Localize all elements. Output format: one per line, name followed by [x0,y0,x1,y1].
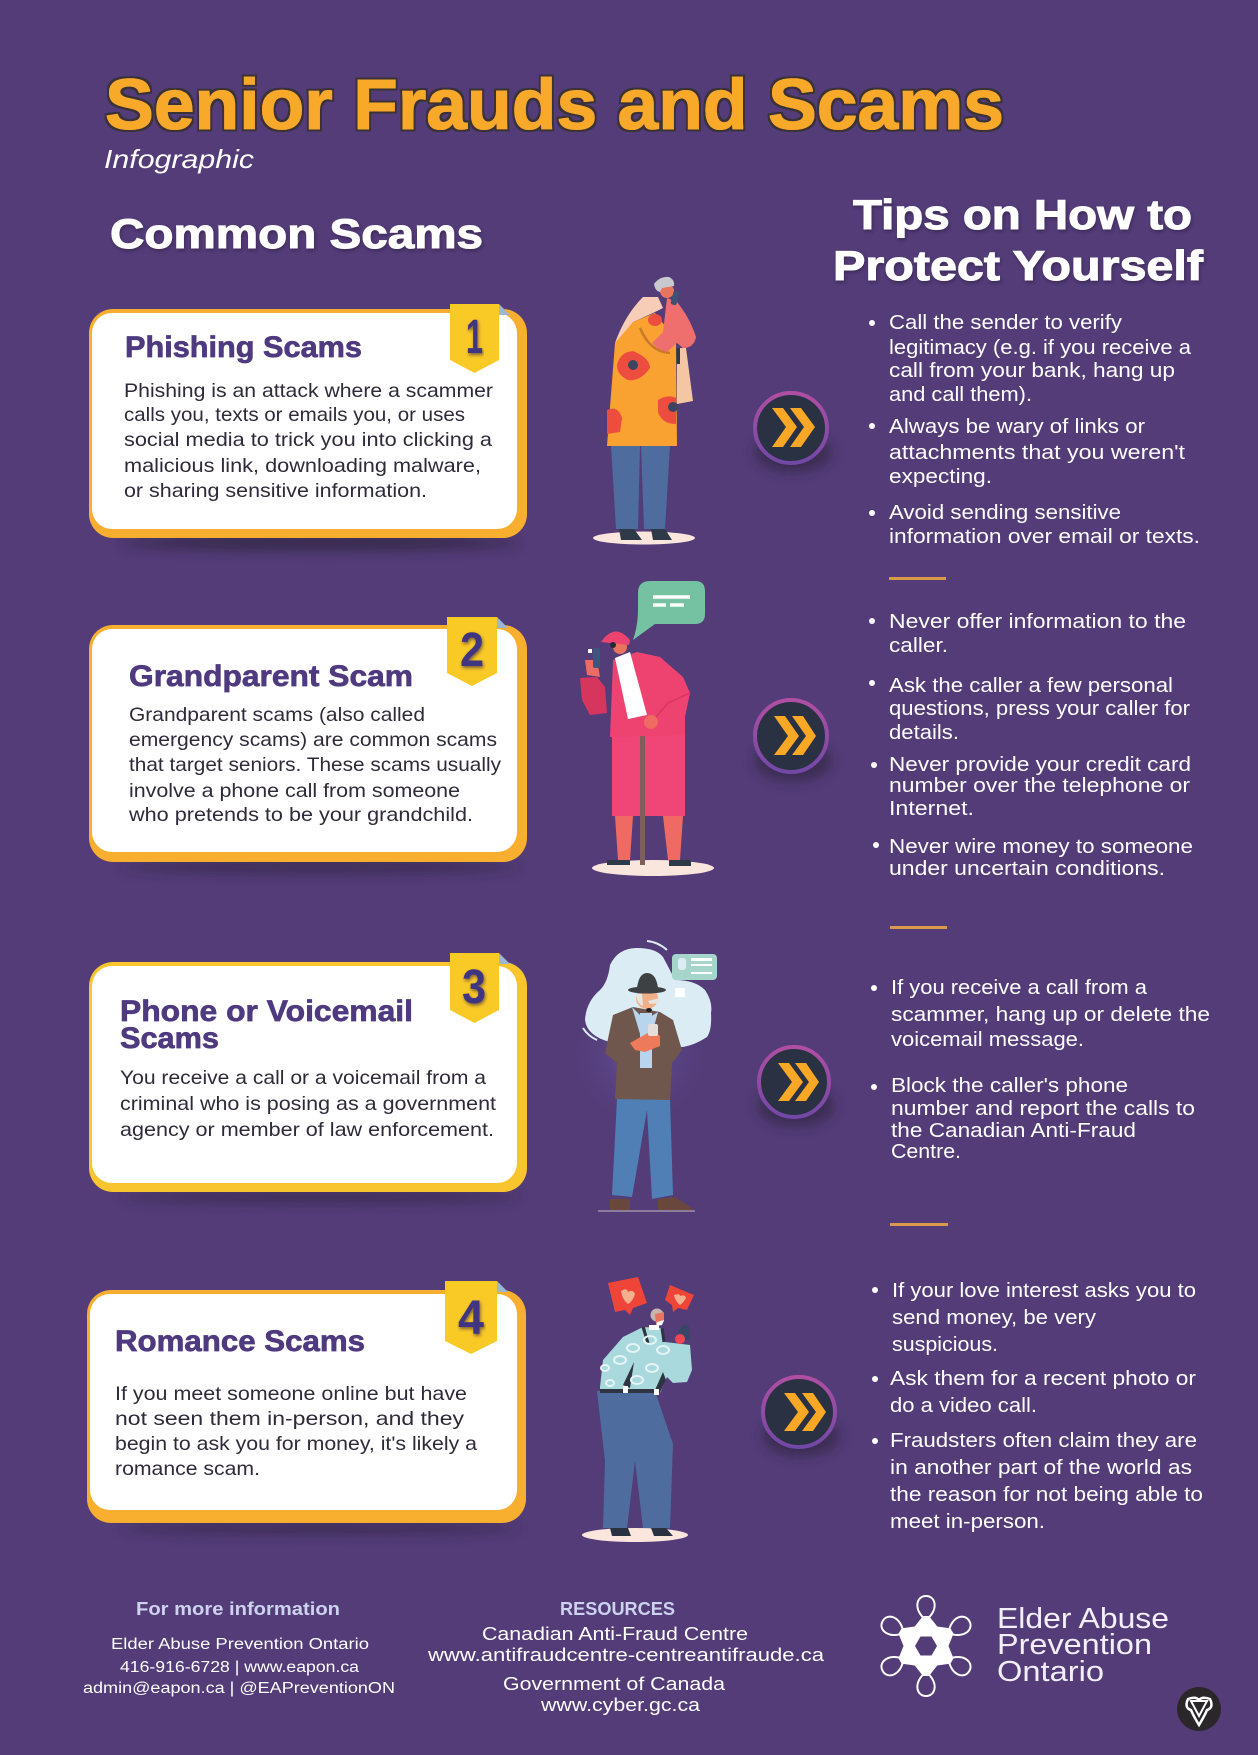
tips: grandparent: details. [889,722,959,744]
tips: phishing: attachments that you weren't [889,442,1186,464]
logo text: Prevention [997,1629,1152,1661]
footer: resources: www.cyber.gc.ca [540,1695,701,1715]
tips: grandparent: number over the telephone or [889,775,1190,797]
tips: romance: Fraudsters often claim they are [890,1430,1197,1452]
subtitle: Infographic [104,144,254,174]
panel: phone or voicemail scams card: You receive a call or a voicemail from a [120,1067,486,1089]
footer: contact information: 416-916-6728 | www.eapon.ca [120,1659,359,1676]
title: Senior Frauds and Scams [105,66,1004,145]
panel: grandparent scam card: emergency scams) are common scams [129,729,497,751]
panel: phishing scams card: Phishing Scams [125,331,362,364]
heading: tips: Protect Yourself [833,242,1204,289]
panel: grandparent scam card: who pretends to be your grandchild. [128,804,473,826]
tips: romance [872,1280,1203,1533]
tips: phone or voicemail: voicemail message. [891,1029,1084,1051]
tips: romance: suspicious. [892,1334,998,1356]
panel: romance scams card [87,1281,526,1534]
tips: phone or voicemail: Block the caller's phone [891,1075,1128,1097]
tips: phishing: Always be wary of links or [889,416,1145,438]
panel: grandparent scam card: 2 [460,624,484,677]
panel: phone or voicemail scams card: agency or member of law enforcement. [120,1119,494,1141]
tips: phishing: call from your bank, hang up [889,360,1175,382]
tips: romance: If your love interest asks you to [892,1280,1196,1302]
tips: phishing: information over email or texts. [889,526,1200,548]
logo: ontario trillium [1177,1687,1221,1731]
icon: double chevron arrow 4 [763,1377,839,1456]
panel: phone or voicemail scams card: 3 [462,961,486,1014]
logo: elder abuse prevention ontario ribbon [876,1596,976,1696]
footer: contact information: admin@eapon.ca | @EAPreventionON [83,1680,395,1697]
tips: romance: send money, be very [892,1307,1096,1329]
tips: grandparent: Never offer information to the [889,611,1186,633]
tips: phishing: Call the sender to verify [889,312,1122,334]
panel: phishing scams card [89,304,527,550]
panel: romance scams card: romance scam. [115,1458,260,1480]
panel: grandparent scam card: Grandparent scams (also called [129,704,425,726]
tips: phishing: Avoid sending sensitive [889,502,1121,524]
panel: romance scams card: Romance Scams [115,1325,365,1358]
panel: romance scams card: not seen them in-person, and they [115,1408,464,1430]
tips: phishing: legitimacy (e.g. if you receive a [889,337,1192,359]
tips: phishing: expecting. [889,466,992,488]
tips: grandparent: questions, press your caller for [889,698,1190,720]
tips: phishing [869,312,1200,548]
heading: common scams: Common Scams [110,210,483,257]
panel: phone or voicemail scams card: Scams [120,1022,219,1055]
tips: phone or voicemail: the Canadian Anti-Fraud [891,1120,1136,1142]
tips: grandparent: Never provide your credit card [889,754,1191,776]
tips: romance: the reason for not being able to [890,1484,1203,1506]
panel: phone or voicemail scams card: criminal who is posing as a government [120,1093,497,1115]
tips: phone or voicemail: number and report the calls to [891,1098,1195,1120]
tips: phishing: and call them). [889,384,1032,406]
tips: phone or voicemail: If you receive a call from a [891,977,1148,999]
tips: phone or voicemail: Centre. [891,1141,961,1163]
tips: grandparent: Ask the caller a few personal [889,675,1173,697]
footer: contact information: For more information [136,1599,340,1619]
tips: grandparent: Never wire money to someone [889,836,1193,858]
tips: phone or voicemail: scammer, hang up or delete the [891,1004,1210,1026]
logo text: Elder Abuse [997,1603,1169,1635]
panel: phishing scams card: malicious link, downloading malware, [124,455,481,477]
panel: phone or voicemail scams card [89,953,527,1203]
illustration: man with phone and cloud [565,941,717,1212]
tips: romance: do a video call. [890,1395,1037,1417]
tips: grandparent [869,611,1193,880]
icon: double chevron arrow 1 [755,393,831,472]
panel: phishing scams card: calls you, texts or emails you, or uses [124,404,465,426]
tips: romance: in another part of the world as [890,1457,1192,1479]
panel: grandparent scam card [89,617,527,873]
illustration: woman in pink with cane [580,581,714,876]
panel: phishing scams card: or sharing sensitive information. [124,480,427,502]
logo text [997,1603,1169,1688]
tips: grandparent: Internet. [889,798,974,820]
panel: romance scams card: 4 [458,1292,484,1345]
icon: double chevron arrow 2 [755,700,831,781]
footer: resources [427,1599,825,1715]
tips: grandparent: caller. [889,635,948,657]
tips: grandparent: under uncertain conditions. [889,858,1165,880]
illustration: man with heart messages [582,1277,694,1542]
footer: resources: Government of Canada [503,1674,726,1694]
footer: contact information: Elder Abuse Prevention Ontario [111,1636,369,1653]
panel: grandparent scam card: Grandparent Scam [129,660,413,693]
heading: tips: Tips on How to [853,191,1192,238]
footer: resources: Canadian Anti-Fraud Centre [482,1624,748,1644]
panel: romance scams card: If you meet someone online but have [115,1383,467,1405]
illustration: woman in orange dress [593,277,696,544]
panel: phone or voicemail scams card: Phone or Voicemail [120,995,413,1028]
tips: phone or voicemail [871,977,1210,1163]
panel: grandparent scam card: that target seniors. These scams usually [129,754,501,776]
panel: phishing scams card: social media to trick you into clicking a [124,429,492,451]
panel: phishing scams card: Phishing is an attack where a scammer [124,380,494,402]
heading: tips [833,191,1204,289]
icon: double chevron arrow 3 [758,1047,834,1126]
panel: phishing scams card: 1 [466,311,483,364]
tips: romance: meet in-person. [890,1511,1045,1533]
footer: contact information [83,1599,395,1697]
panel: grandparent scam card: involve a phone call from someone [129,780,460,802]
footer: resources: www.antifraudcentre-centreantifraude.ca [427,1645,825,1665]
tips: romance: Ask them for a recent photo or [890,1368,1196,1390]
panel: romance scams card: begin to ask you for money, it's likely a [115,1433,477,1455]
footer: resources: RESOURCES [560,1599,675,1619]
logo text: Ontario [997,1656,1104,1688]
